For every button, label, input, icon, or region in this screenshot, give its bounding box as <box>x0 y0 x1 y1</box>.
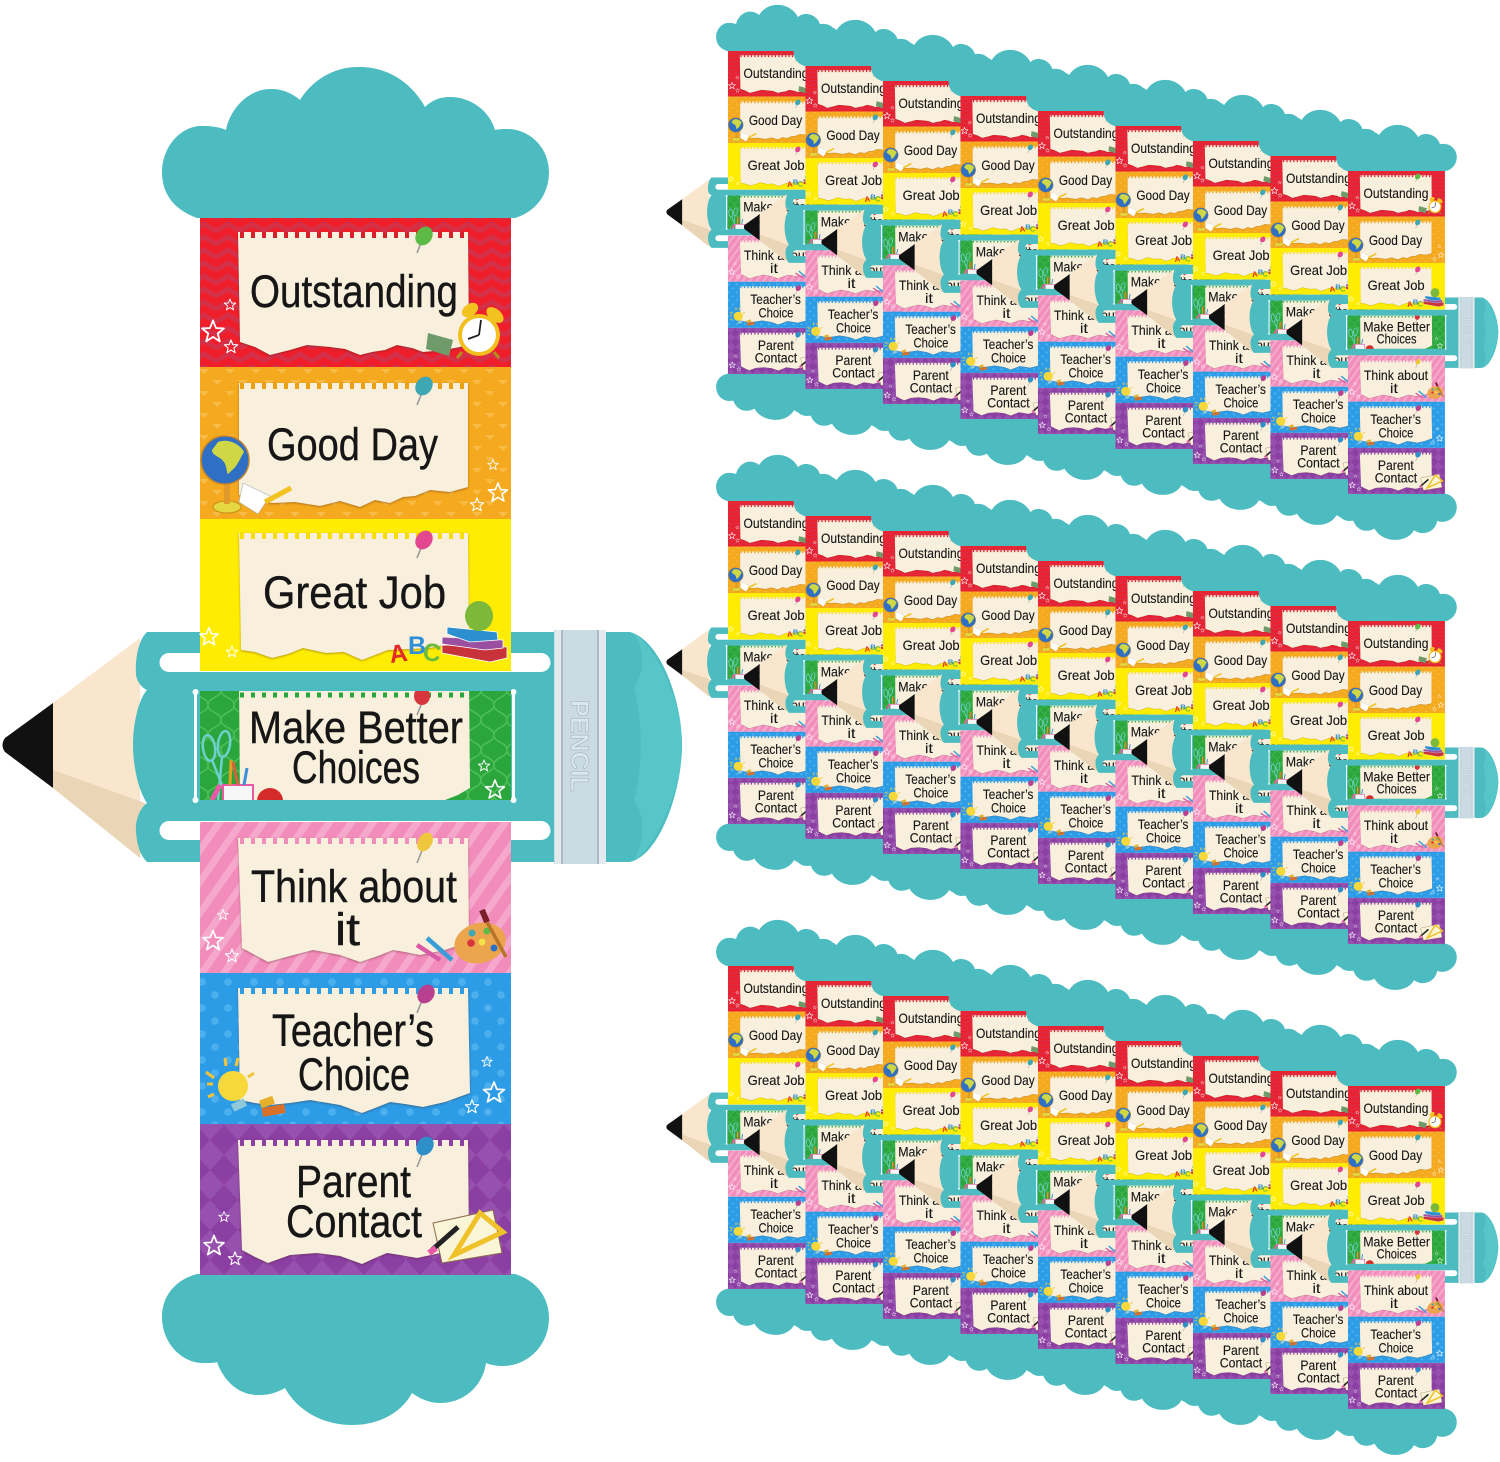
torn paper note <box>239 680 470 800</box>
stars <box>465 1056 504 1113</box>
pencil graphite tip <box>2 703 53 788</box>
band: Think about it <box>200 822 511 973</box>
label: Think about: Think about <box>251 861 457 912</box>
small chart r3c9 <box>1286 1040 1498 1455</box>
small chart r3c7 <box>1131 1010 1343 1425</box>
push pin <box>414 687 430 715</box>
pencil teal body with slots <box>133 632 625 862</box>
stars <box>470 460 508 511</box>
small chart r1c3 <box>821 35 1033 450</box>
small chart r2c5 <box>976 515 1188 930</box>
stars <box>202 299 238 353</box>
ABC letters: C <box>421 638 443 668</box>
push pin <box>412 373 436 405</box>
push pin <box>412 527 436 558</box>
green patterned background <box>200 691 511 800</box>
small chart r2c2 <box>744 470 956 885</box>
torn paper note <box>238 838 469 962</box>
pink striped background <box>200 822 511 973</box>
small chart r3c6 <box>1054 995 1266 1410</box>
small chart r2c6 <box>1054 530 1266 945</box>
paper perforations <box>240 533 468 539</box>
paint palette <box>450 910 510 969</box>
band: Outstanding <box>200 218 511 367</box>
stars <box>203 910 239 962</box>
notepad and pencil <box>239 483 291 514</box>
light bulb <box>206 1058 254 1112</box>
label: Choices: Choices <box>292 742 420 793</box>
small chart r2c3 <box>821 485 1033 900</box>
small chart r2c7 <box>1131 545 1343 960</box>
blue dotted background <box>200 973 511 1124</box>
paper perforations <box>240 692 468 698</box>
metal ferrule <box>554 630 606 864</box>
yellow background <box>200 519 511 671</box>
bottom cloud footer <box>162 1274 549 1425</box>
torn paper note <box>239 533 469 660</box>
push pin <box>412 223 436 253</box>
orange patterned background <box>200 367 511 519</box>
paper perforations <box>240 232 468 238</box>
label: Make Better: Make Better <box>249 702 463 753</box>
red apple <box>257 788 283 814</box>
pencil sharpener <box>426 333 453 356</box>
stars <box>478 760 504 798</box>
red patterned background <box>200 218 511 367</box>
small chart r3c8 <box>1209 1025 1421 1440</box>
small chart r1c9 <box>1286 125 1498 540</box>
ABC letters <box>387 632 443 669</box>
small chart r3c2 <box>744 935 956 1350</box>
small chart r1c6 <box>1054 80 1266 495</box>
small chart r1c4 <box>899 50 1111 465</box>
band: Make Better Choices <box>200 680 511 814</box>
globe <box>201 436 249 513</box>
ABC letters: B <box>408 632 426 660</box>
push pin <box>413 1133 437 1167</box>
small chart r1c5 <box>976 65 1188 480</box>
alarm clock <box>457 300 507 358</box>
book stack <box>442 627 507 662</box>
crayons <box>417 938 452 960</box>
push pin <box>414 830 436 863</box>
label: Contact: Contact <box>286 1196 422 1247</box>
label: Parent: Parent <box>296 1156 411 1207</box>
eraser highlight <box>634 634 682 860</box>
top cloud header <box>162 67 549 218</box>
small chart r3c5 <box>976 980 1188 1395</box>
band: Good Day <box>200 367 511 519</box>
band: Great Job <box>200 519 511 671</box>
label: Great Job: Great Job <box>263 567 446 618</box>
label: Outstanding: Outstanding <box>250 266 458 317</box>
purple patterned background <box>200 1124 511 1275</box>
label: Good Day: Good Day <box>267 419 438 470</box>
small chart r2c4 <box>899 500 1111 915</box>
small chart r1c8 <box>1209 110 1421 525</box>
book and ruler <box>429 1210 503 1263</box>
pencil wood cone <box>53 638 140 858</box>
stars <box>200 628 238 657</box>
small chart r3c3 <box>821 950 1033 1365</box>
small chart r3c4 <box>899 965 1111 1380</box>
large behavior clip chart <box>2 67 682 1425</box>
label: Choice: Choice <box>298 1049 410 1100</box>
small chart r2c9 <box>1286 575 1498 990</box>
band: Teacher's Choice <box>200 973 511 1124</box>
row 2 of small charts <box>666 455 1498 990</box>
row 3 of small charts <box>666 920 1498 1455</box>
push pin <box>414 981 438 1013</box>
small chart r2c8 <box>1209 560 1421 975</box>
paper perforations <box>240 838 468 844</box>
pencil eraser cap <box>608 632 682 862</box>
torn paper note <box>238 1140 469 1264</box>
band: Parent Contact <box>200 1124 511 1275</box>
paper perforations <box>240 383 468 389</box>
green apple <box>465 601 493 631</box>
small chart r3c1 <box>666 920 878 1335</box>
row 1 of small charts <box>666 5 1498 540</box>
window slits <box>192 689 516 803</box>
small chart r1c7 <box>1131 95 1343 510</box>
ABC letters: A <box>387 639 409 669</box>
building blocks <box>259 1096 286 1117</box>
small chart r1c1 <box>666 5 878 420</box>
paper perforations <box>240 988 468 994</box>
stars <box>204 1212 242 1265</box>
label: Teacher's: Teacher’s <box>272 1005 434 1056</box>
pencil clip <box>2 630 682 864</box>
small chart r1c2 <box>744 20 956 435</box>
label: it: it <box>335 904 361 955</box>
scissors <box>201 730 232 800</box>
small chart r2c1 <box>666 455 878 870</box>
torn paper note <box>238 988 470 1113</box>
torn paper note <box>239 383 468 507</box>
torn paper note <box>238 232 469 355</box>
paper perforations <box>240 1140 468 1146</box>
pencil cup <box>212 760 253 805</box>
pencil wood shading <box>53 770 145 858</box>
ferrule label: PENCIL <box>565 700 593 792</box>
